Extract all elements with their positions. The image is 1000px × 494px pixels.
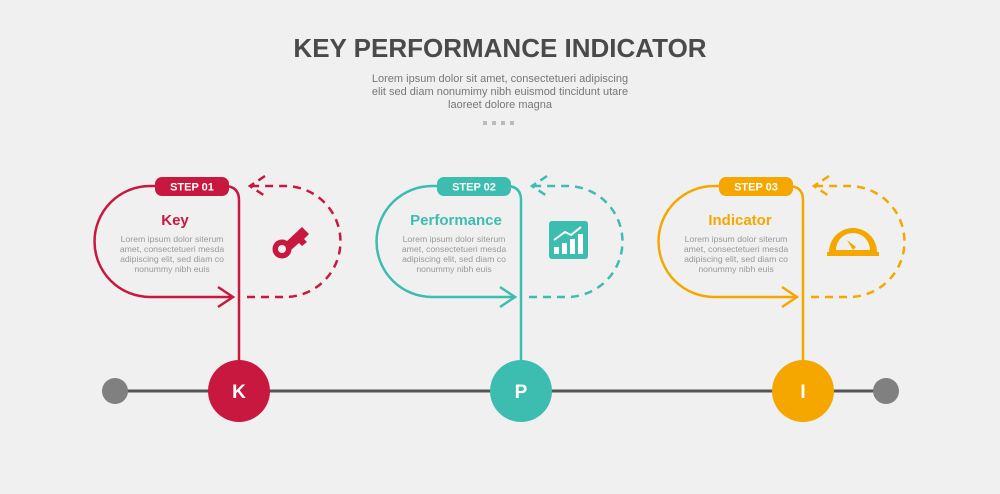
step 2 [377, 176, 622, 362]
step 1: STEP 01 [170, 182, 214, 194]
step 3: adipiscing elit, sed diam co [684, 254, 788, 264]
text: P [515, 382, 528, 403]
step 3: Lorem ipsum dolor siterum [685, 234, 787, 244]
step 1: amet, consectetueri mesda [120, 244, 224, 254]
step 2: Lorem ipsum dolor siterum [403, 234, 505, 244]
step 3: Indicator [708, 212, 772, 229]
step 1 [95, 176, 340, 362]
dots [483, 121, 514, 125]
step 2: Performance [410, 212, 502, 229]
step 2: STEP 02 [452, 182, 496, 194]
subtitle: elit sed diam nonumimy nibh euismod tincidunt utare [372, 86, 628, 98]
step 3: nonummy nibh euis [698, 264, 774, 274]
icon: chart [549, 221, 588, 259]
text: I [800, 382, 806, 403]
title: KEY PERFORMANCE INDICATOR [293, 33, 707, 63]
icon: key [272, 227, 309, 258]
subtitle: laoreet dolore magna [448, 99, 553, 111]
text: K [232, 382, 246, 403]
step 2: amet, consectetueri mesda [402, 244, 506, 254]
step 1: Key [161, 212, 189, 229]
step 3: amet, consectetueri mesda [684, 244, 788, 254]
step 3 [659, 176, 904, 362]
subtitle: Lorem ipsum dolor sit amet, consectetueri adipiscing [372, 73, 628, 85]
step 2: nonummy nibh euis [416, 264, 492, 274]
timeline [102, 378, 899, 404]
icon: gauge [827, 228, 879, 256]
subtitle [372, 73, 628, 111]
step 1: adipiscing elit, sed diam co [120, 254, 224, 264]
step 1: Lorem ipsum dolor siterum [121, 234, 223, 244]
step 1: nonummy nibh euis [134, 264, 210, 274]
step 3: STEP 03 [734, 182, 778, 194]
step 2: adipiscing elit, sed diam co [402, 254, 506, 264]
